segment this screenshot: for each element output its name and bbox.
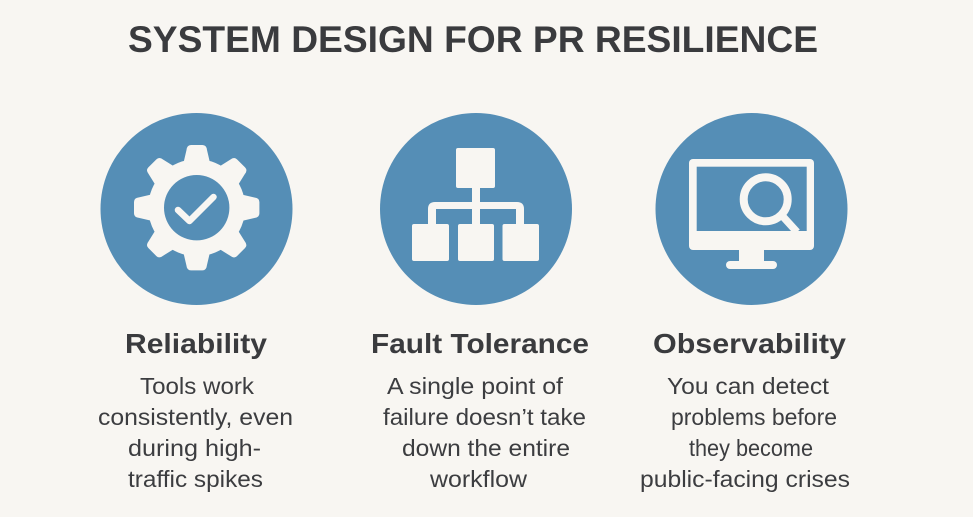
text: fault tolerance description: failure doesn’t take [383,404,586,430]
text: observability description [640,373,850,492]
icon: hierarchy network [380,113,572,305]
heading: reliability: Reliability [125,328,267,359]
text: observability description: problems before [671,404,837,430]
text: reliability description: traffic spikes [128,466,263,492]
text: fault tolerance description: down the entire [402,435,570,461]
icon: gear with checkmark [100,113,292,305]
heading: fault tolerance: Fault Tolerance [371,328,589,359]
title: SYSTEM DESIGN FOR PR RESILIENCE [128,19,818,60]
text: observability description: You can detect [667,373,830,399]
text: fault tolerance description: A single point of [387,373,564,399]
text: reliability description: during high- [128,435,261,461]
text: reliability description [98,373,293,492]
text: fault tolerance description [383,373,586,492]
icon: monitor with magnifier [656,113,848,305]
panel: fault tolerance [371,113,589,492]
panel: observability [640,113,850,492]
panel: reliability [98,113,293,492]
text: observability description: public-facing crises [640,466,850,492]
heading: observability: Observability [653,328,846,359]
text: fault tolerance description: workflow [429,466,527,492]
text: reliability description: consistently, even [98,404,293,430]
text: observability description: they become [689,435,813,461]
text: reliability description: Tools work [140,373,255,399]
